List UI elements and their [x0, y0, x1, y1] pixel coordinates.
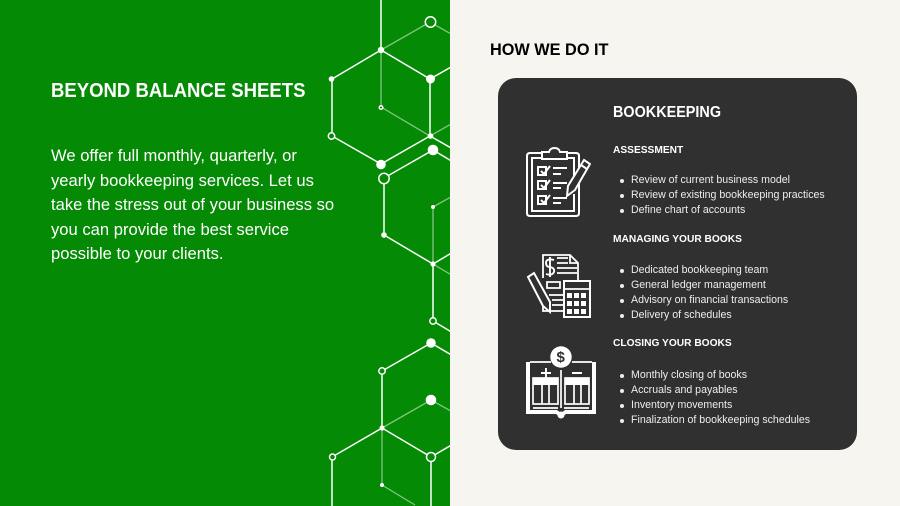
list: managing your books: Delivery of schedules [631, 308, 732, 320]
list: assessment: Define chart of accounts [631, 204, 745, 216]
list: assessment [620, 174, 825, 216]
coin dollar sign: $ [556, 349, 565, 366]
icon: open ledger with dollar coin [526, 346, 596, 418]
icon: invoice, pencil and calculator [526, 254, 591, 318]
heading: assessment: ASSESSMENT [613, 144, 683, 156]
list: closing your books [620, 368, 810, 426]
intro paragraph: yearly bookkeeping services. Let us [51, 170, 314, 190]
intro paragraph: you can provide the best service [51, 220, 289, 238]
intro paragraph: take the stress out of your business so [51, 195, 334, 214]
list: managing your books: Dedicated bookkeeping team [631, 264, 768, 276]
icon: clipboard checklist with pencil [526, 147, 591, 217]
heading: closing your books: CLOSING YOUR BOOKS [613, 338, 732, 349]
list: closing your books: Inventory movements [631, 398, 732, 410]
card title: bookkeeping: BOOKKEEPING [613, 104, 721, 120]
intro paragraph: possible to your clients. [51, 244, 223, 263]
list: managing your books: Advisory on financial transactions [631, 294, 788, 306]
intro paragraph: We offer full monthly, quarterly, or [51, 146, 297, 165]
list: managing your books: General ledger management [631, 278, 766, 290]
heading: how we do it: HOW WE DO IT [490, 41, 608, 59]
hexagon network pattern [328, 0, 450, 506]
list: closing your books: Finalization of bookkeeping schedules [631, 414, 810, 426]
intro paragraph [51, 146, 334, 263]
heading: managing your books: MANAGING YOUR BOOKS [613, 234, 742, 245]
list: managing your books [620, 264, 788, 320]
heading: beyond balance sheets: BEYOND BALANCE SHEETS [51, 80, 305, 102]
panel: bookkeeping card [498, 78, 857, 450]
list: assessment: Review of existing bookkeeping practices [631, 188, 825, 200]
list: closing your books: Accruals and payables [631, 384, 738, 396]
list: assessment: Review of current business model [631, 174, 790, 186]
list: closing your books: Monthly closing of books [631, 368, 747, 380]
panel: green left side [0, 0, 450, 506]
